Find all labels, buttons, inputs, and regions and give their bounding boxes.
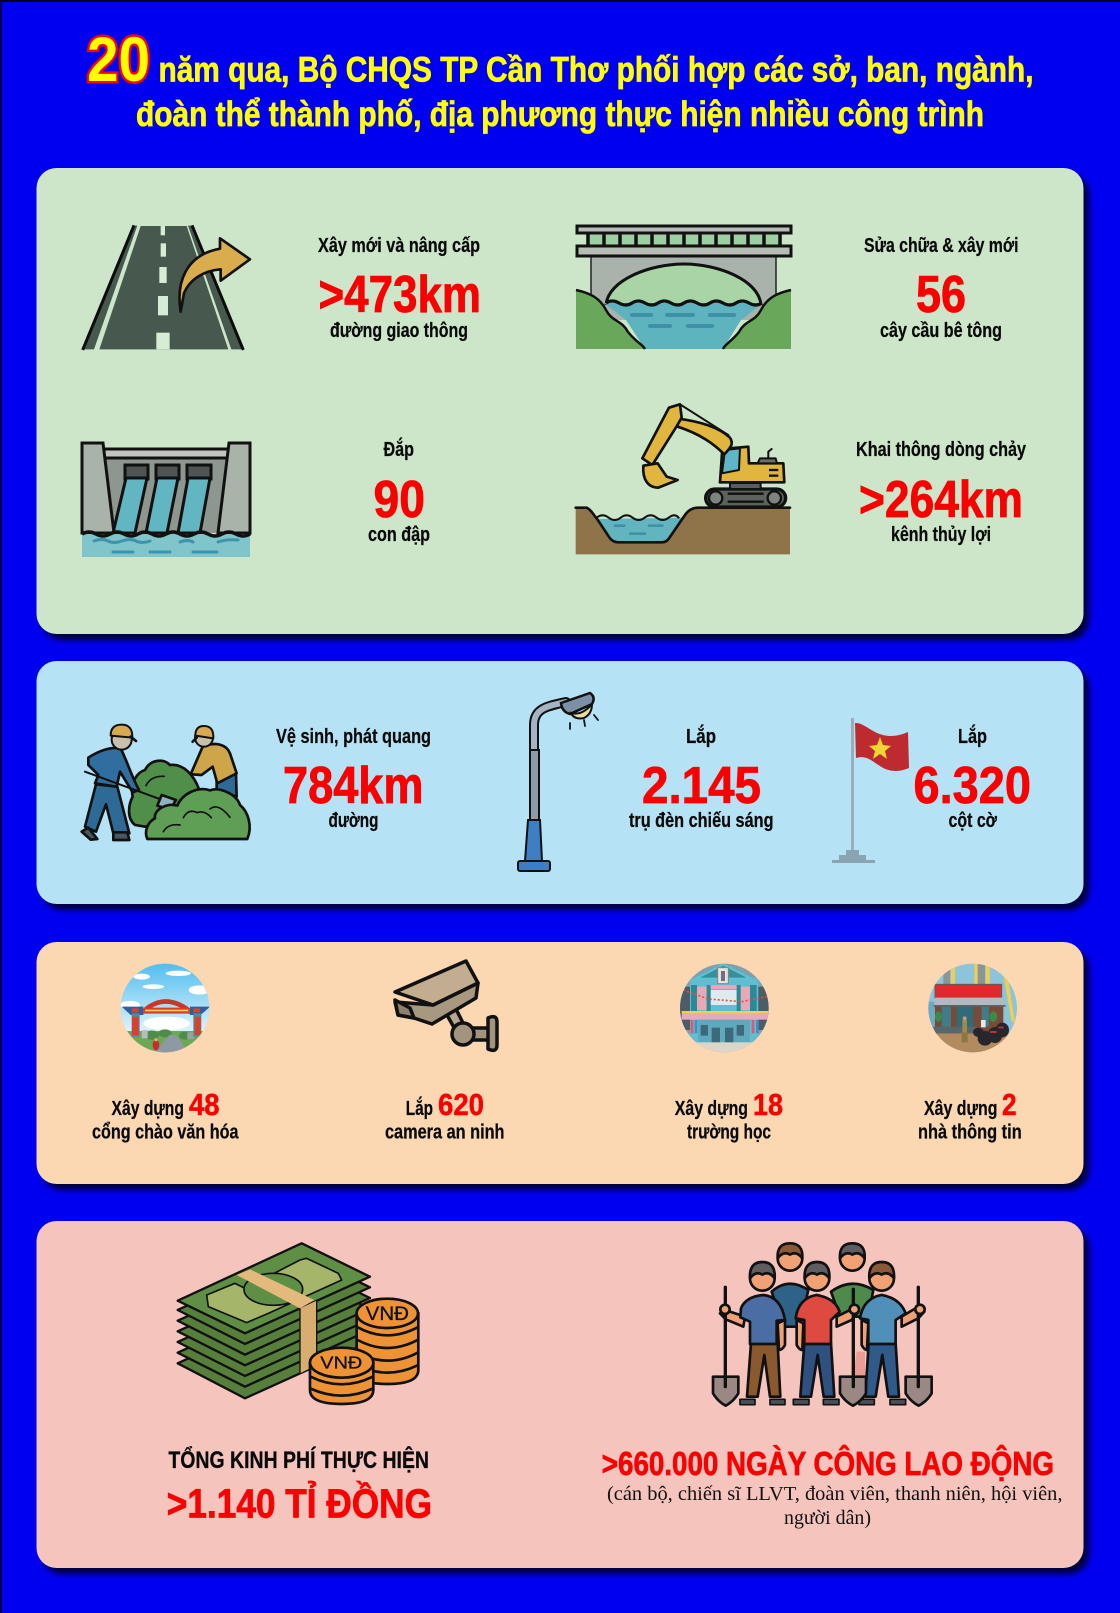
icon: money and VND coins: VNĐ: [366, 1304, 409, 1325]
icon: bridge: [576, 226, 791, 349]
text: dam stat: Đắp: [384, 437, 414, 461]
text: camera stat: camera an ninh: [385, 1122, 504, 1144]
icon: street lamp: [518, 693, 598, 871]
panel: totals: [36, 1221, 1084, 1568]
text: school stat: Xây dựng: [675, 1098, 748, 1120]
text: information house stat: [918, 1087, 1022, 1144]
text: clearing stat: đường: [328, 810, 378, 832]
icon: dam: [82, 443, 250, 557]
text: gate stat: cổng chào văn hóa: [92, 1122, 239, 1144]
text: canal stat: Khai thông dòng chảy: [856, 439, 1027, 461]
icon: money and VND coins: [178, 1243, 418, 1404]
text: total funding: [167, 1446, 432, 1527]
text: camera stat: Lắp: [406, 1096, 433, 1120]
title: đoàn thể thành phố, địa phương thực hiện nhiều công trình: [136, 95, 984, 134]
text: gate stat: Xây dựng: [112, 1098, 184, 1120]
text: school stat: [675, 1087, 783, 1144]
icon: workers with shovels: [713, 1243, 932, 1406]
icon: security camera: [395, 961, 497, 1050]
title: [87, 25, 1034, 134]
text: camera stat: 620: [438, 1087, 484, 1122]
icon: cultural gate: [120, 964, 210, 1052]
text: bridge stat: [864, 235, 1018, 342]
text: road stat: >473km: [318, 266, 481, 324]
text: total funding: TỔNG KINH PHÍ THỰC HIỆN: [168, 1446, 429, 1474]
text: flag pole stat: cột cờ: [948, 810, 998, 832]
text: dam stat: con đập: [368, 524, 430, 546]
text: dam stat: 90: [374, 471, 425, 529]
text: road stat: [318, 235, 481, 342]
text: labour days: người dân): [784, 1507, 871, 1529]
text: bridge stat: cây cầu bê tông: [880, 320, 1002, 342]
text: bridge stat: 56: [916, 266, 966, 324]
text: labour days: (cán bộ, chiến sĩ LLVT, đoàn viên, thanh niên, hội viên,: [607, 1483, 1062, 1505]
icon: school: [680, 964, 769, 1052]
text: dam stat: [368, 437, 430, 546]
text: clearing stat: Vệ sinh, phát quang: [276, 726, 431, 748]
icon: information house: [928, 964, 1017, 1052]
text: flag pole stat: Lắp: [958, 724, 987, 748]
text: road stat: đường giao thông: [330, 320, 468, 342]
icon: money and VND coins: VNĐ: [320, 1353, 362, 1373]
panel: community constructions: [36, 942, 1084, 1184]
icon: road with arrow: [83, 225, 250, 350]
panel: traffic and water works: [36, 168, 1084, 634]
icon: excavator: [576, 404, 790, 554]
text: school stat: 18: [753, 1087, 783, 1122]
person right: [859, 1262, 924, 1405]
text: canal stat: [856, 439, 1027, 546]
person centre: [793, 1262, 858, 1405]
text: flag pole stat: 6.320: [914, 757, 1031, 815]
text: flag pole stat: [914, 724, 1031, 832]
shovels: [713, 1287, 932, 1406]
text: information house stat: 2: [1002, 1087, 1017, 1122]
text: clearing stat: 784km: [283, 757, 424, 815]
text: street light stat: trụ đèn chiếu sáng: [629, 810, 774, 832]
text: clearing stat: [276, 726, 431, 832]
text: total funding: >1.140 TỈ ĐỒNG: [167, 1481, 432, 1527]
text: gate stat: [92, 1087, 239, 1144]
text: canal stat: kênh thủy lợi: [891, 524, 991, 546]
text: information house stat: nhà thông tin: [918, 1122, 1022, 1144]
title: 20: [87, 25, 150, 95]
icon: workers clearing bushes: [82, 725, 250, 840]
text: street light stat: [629, 724, 774, 832]
person left: [720, 1262, 785, 1405]
icon: Vietnam flag: [832, 718, 909, 863]
text: labour days: [602, 1444, 1062, 1529]
text: information house stat: Xây dựng: [924, 1098, 998, 1120]
text: camera stat: [385, 1087, 504, 1144]
text: gate stat: 48: [189, 1087, 220, 1122]
text: bridge stat: Sửa chữa & xây mới: [864, 235, 1018, 257]
text: school stat: trường học: [687, 1122, 771, 1144]
text: road stat: Xây mới và nâng cấp: [318, 235, 480, 257]
text: canal stat: >264km: [859, 471, 1023, 529]
text: street light stat: Lắp: [686, 724, 716, 748]
text: street light stat: 2.145: [642, 757, 761, 815]
panel: cleaning and lighting: [36, 661, 1084, 904]
